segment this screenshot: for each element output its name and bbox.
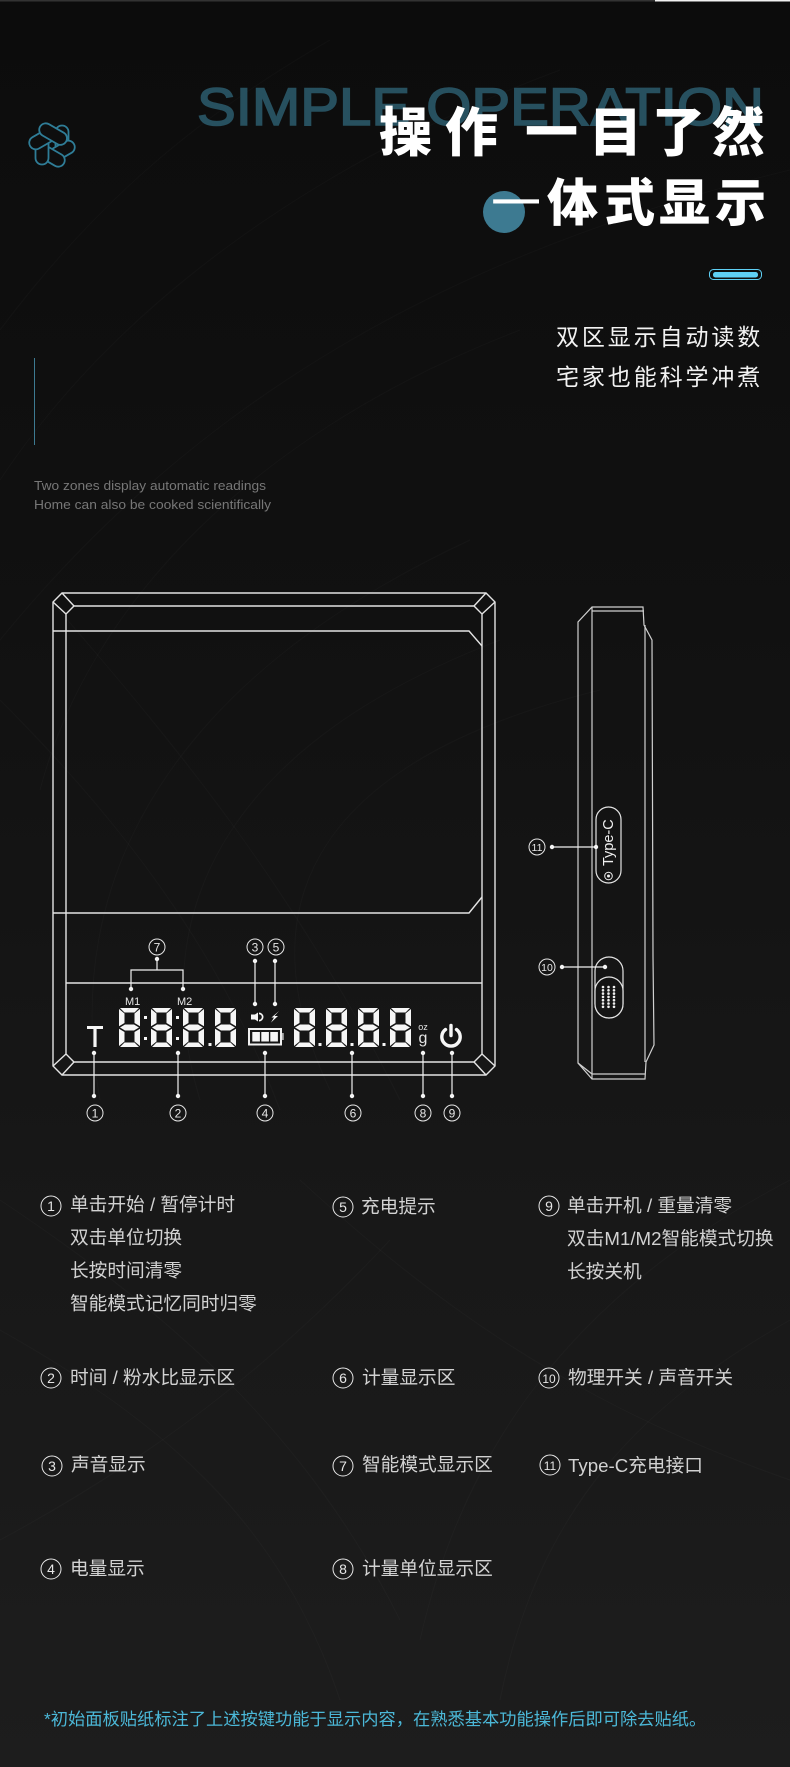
- legend: item 1: 1: [47, 1198, 55, 1214]
- callout lines and dots: [92, 957, 454, 1098]
- icon: power: [442, 1026, 460, 1046]
- accent pill: [710, 270, 762, 280]
- legend: item 10: 物理开关 / 声音开关: [568, 1367, 733, 1388]
- M1 M2 labels: M1: [125, 996, 140, 1008]
- icon: battery: [249, 1029, 284, 1044]
- callout numbers: 3: [252, 940, 259, 954]
- legend: item 9: 长按关机: [567, 1261, 642, 1282]
- Type-C port: Type-C: [601, 819, 617, 866]
- side outline: [578, 607, 654, 1079]
- legend: item 9: 单击开机 / 重量清零: [567, 1195, 732, 1216]
- legend: item 9: 9: [545, 1198, 553, 1214]
- legend: item 4: 电量显示: [70, 1558, 145, 1579]
- callout numbers: 9: [449, 1106, 456, 1120]
- legend: item 3: [42, 1454, 146, 1476]
- panel: side view of scale: [529, 607, 654, 1079]
- callout numbers: 1: [92, 1106, 99, 1120]
- legend: item 9: 双击M1/M2智能模式切换: [567, 1228, 774, 1249]
- english subtitle: Two zones display automatic readings: [34, 478, 267, 493]
- english background title: SIMPLE OPERATION: [197, 78, 764, 137]
- legend: item 11: Type-C充电接口: [568, 1455, 703, 1476]
- unit labels: [418, 1022, 428, 1047]
- legend: item 5: 5: [339, 1199, 347, 1215]
- callout numbers: 8: [420, 1106, 427, 1120]
- legend: item 1: [41, 1194, 257, 1314]
- legend: item 3: 3: [48, 1458, 56, 1474]
- physical switch: [595, 957, 623, 1018]
- callout numbers: 7: [154, 940, 161, 954]
- side callouts: 11: [532, 842, 543, 854]
- legend: item 8: 计量单位显示区: [362, 1558, 493, 1579]
- T timer key: [87, 1026, 103, 1047]
- legend: item 5: 充电提示: [361, 1196, 436, 1217]
- decorative teal circle: [483, 191, 525, 233]
- legend: item 2: 时间 / 粉水比显示区: [70, 1367, 235, 1388]
- legend: item 1: 智能模式记忆同时归零: [70, 1293, 257, 1314]
- legend: item 2: 2: [47, 1370, 55, 1386]
- legend: item 6: 计量显示区: [362, 1367, 455, 1388]
- legend: item 7: 智能模式显示区: [362, 1454, 493, 1475]
- footnote: *初始面板贴纸标注了上述按键功能于显示内容，在熟悉基本功能操作后即可除去贴纸。: [44, 1709, 706, 1729]
- legend: item 1: 双击单位切换: [70, 1227, 182, 1248]
- legend: item 7: 7: [339, 1458, 347, 1474]
- side callouts: 10: [541, 962, 553, 974]
- legend: item 3: 声音显示: [71, 1454, 146, 1475]
- callout numbers: 6: [350, 1106, 357, 1120]
- legend: item 1: 单击开始 / 暂停计时: [70, 1194, 235, 1215]
- subtitle: 宅家也能科学冲煮: [556, 364, 763, 390]
- unit labels: g: [419, 1030, 427, 1047]
- legend: item 4: 4: [47, 1561, 55, 1577]
- scale outline: [53, 593, 495, 1075]
- legend: item 9: [539, 1195, 774, 1282]
- legend: item 1: 长按时间清零: [70, 1260, 182, 1281]
- time digits: [119, 1008, 236, 1047]
- title line 2: 体式显示: [547, 175, 766, 232]
- legend: item 6: 6: [339, 1370, 347, 1386]
- title line 1: 操作一目了然: [379, 104, 765, 163]
- english subtitle: [34, 478, 272, 512]
- callout numbers: [87, 939, 460, 1121]
- legend: item 11: 11: [544, 1459, 557, 1473]
- M1 M2 labels: M2: [177, 996, 192, 1008]
- callout numbers: 2: [175, 1106, 182, 1120]
- weight digits: [294, 1008, 411, 1047]
- subtitle: [556, 324, 763, 390]
- subtitle: 双区显示自动读数: [556, 324, 763, 350]
- panel: top view of scale: [53, 593, 495, 1121]
- english subtitle: Home can also be cooked scientifically: [34, 497, 272, 512]
- side callouts: [529, 839, 607, 975]
- callout numbers: 4: [262, 1106, 269, 1120]
- Type-C port: [596, 807, 621, 883]
- vertical accent line: [34, 358, 35, 445]
- M1 M2 labels: [125, 996, 192, 1008]
- icon: charging bolt: [271, 1011, 279, 1022]
- legend: item 8: 8: [339, 1561, 347, 1577]
- icon: sound: [251, 1012, 264, 1022]
- title line 2: 一: [491, 176, 541, 232]
- top edge strip: [0, 0, 790, 2]
- legend: item 10: 10: [542, 1372, 556, 1386]
- callout numbers: 5: [273, 940, 280, 954]
- unit labels: oz: [418, 1022, 428, 1032]
- icon: knot logo: [27, 121, 77, 169]
